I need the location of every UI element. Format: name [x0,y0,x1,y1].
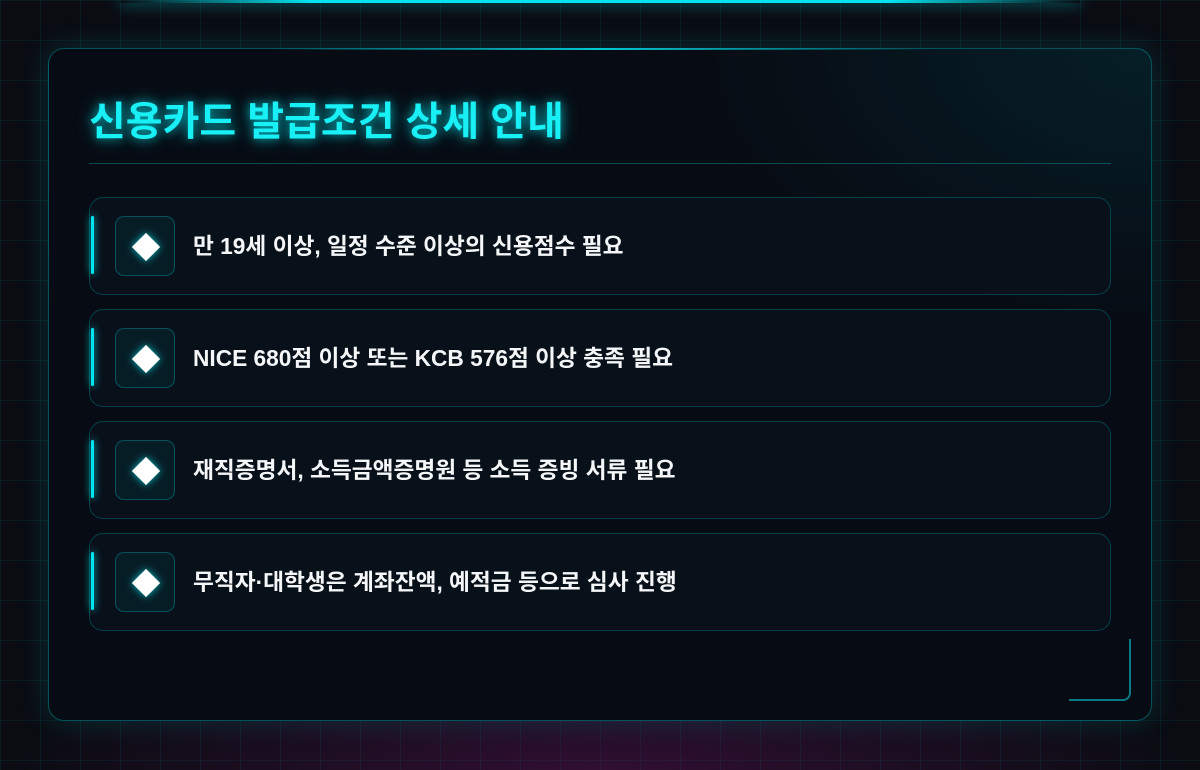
icon: diamond [115,328,175,388]
icon: diamond [115,552,175,612]
item 3 [89,421,1111,519]
text 4: 무직자·대학생은 계좌잔액, 예적금 등으로 심사 진행 [193,569,677,595]
item 2 [89,309,1111,407]
title: 신용카드 발급조건 상세 안내 [89,100,564,144]
corner bracket [1069,639,1131,701]
item 4 [89,533,1111,631]
icon: diamond [115,440,175,500]
item 1 [89,197,1111,295]
icon: diamond [115,216,175,276]
text 3: 재직증명서, 소득금액증명원 등 소득 증빙 서류 필요 [193,457,675,483]
text 1: 만 19세 이상, 일정 수준 이상의 신용점수 필요 [193,233,624,259]
text 2: NICE 680점 이상 또는 KCB 576점 이상 충족 필요 [193,345,673,371]
